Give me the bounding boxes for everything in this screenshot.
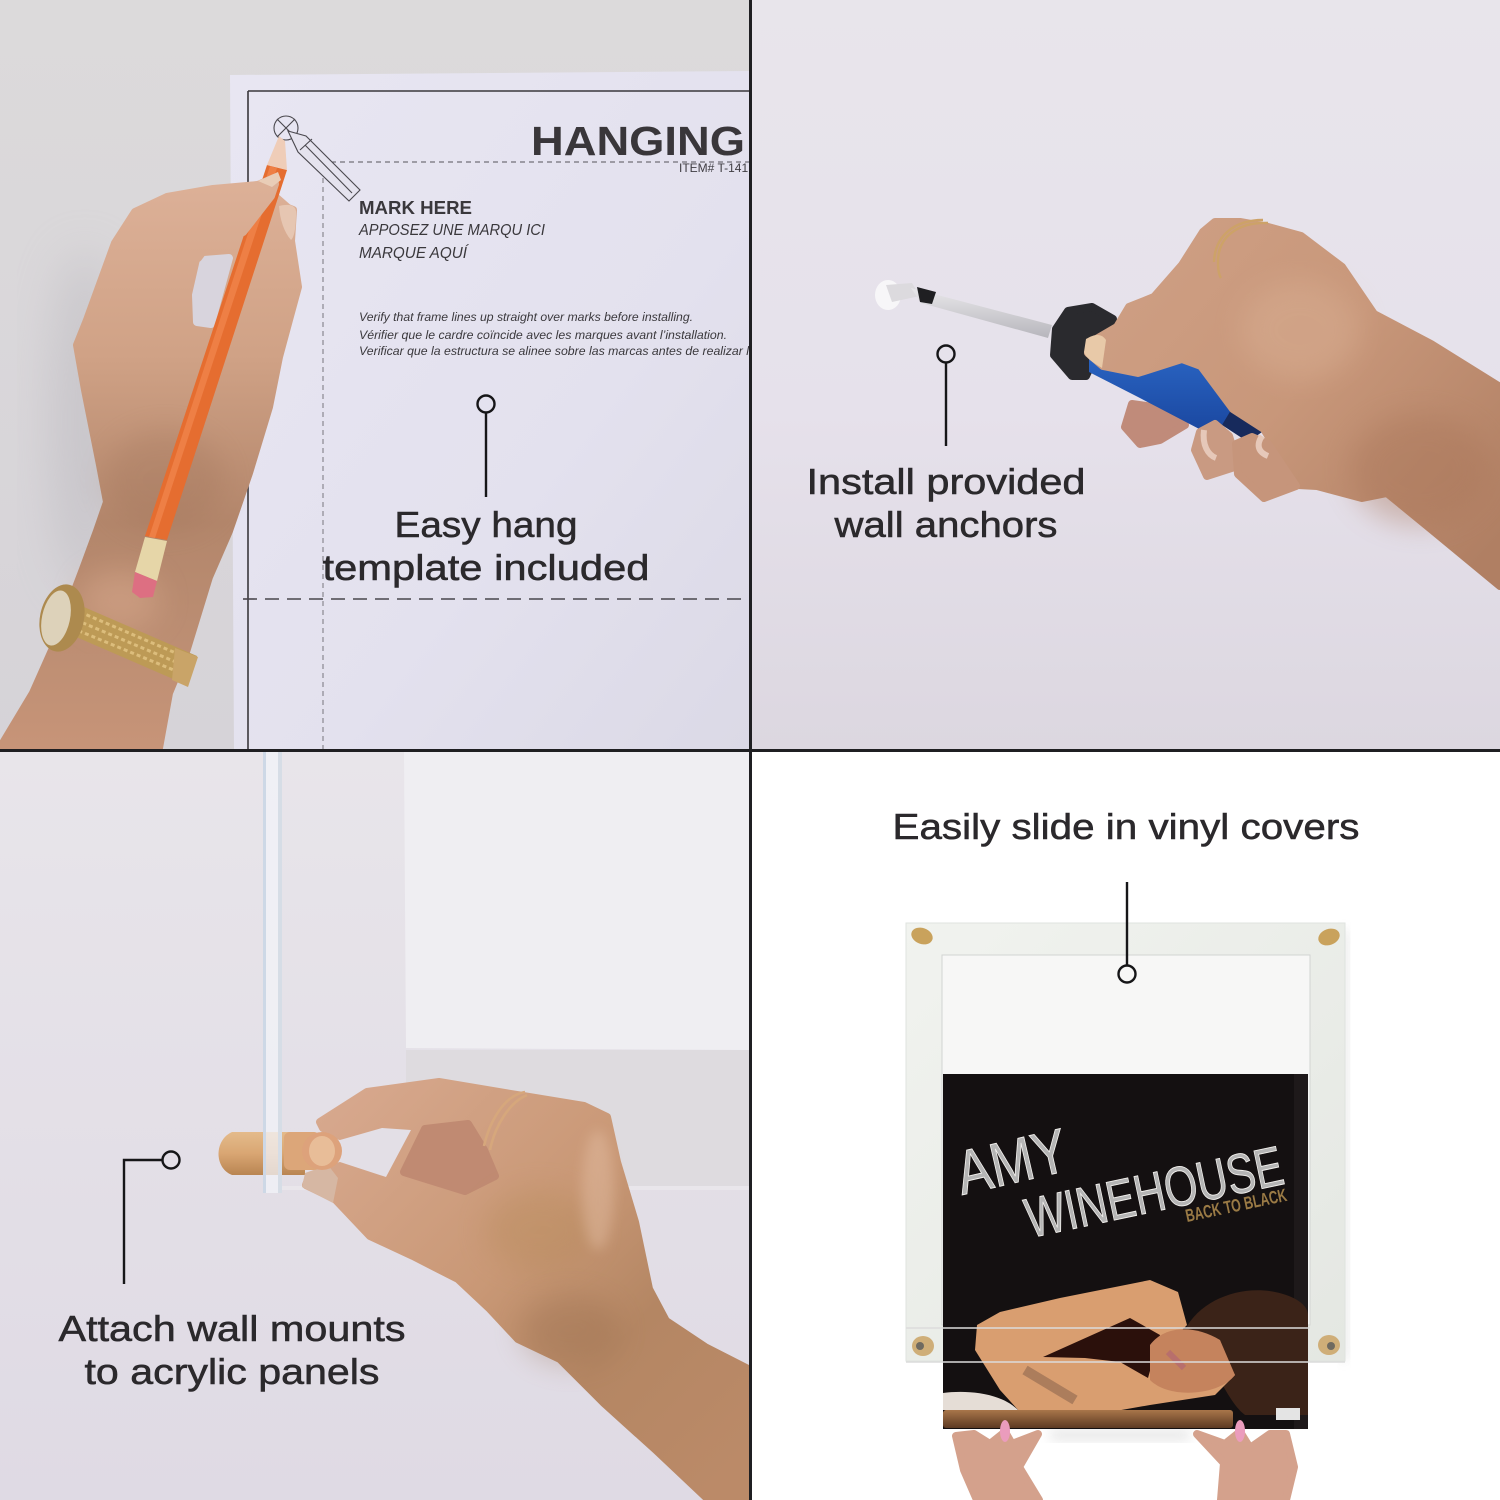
template instructions: Verificar que la estructura se alinee sobre las marcas antes de realizar l bbox=[359, 346, 749, 358]
template mark text: APPOSEZ UNE MARQU ICI bbox=[358, 222, 546, 239]
acrylic bottom edge lines bbox=[906, 1328, 1345, 1362]
panel: easy hang template bbox=[0, 0, 749, 749]
album title bbox=[950, 1116, 1289, 1250]
panel: install wall anchors bbox=[752, 0, 1500, 749]
callout: attach wall mounts: to acrylic panels bbox=[84, 1351, 380, 1392]
template heading: HANGING bbox=[531, 118, 745, 164]
callout: install wall anchors: wall anchors bbox=[833, 504, 1058, 545]
album cover: BACK TO BLACK bbox=[1184, 1185, 1289, 1226]
template mark text bbox=[358, 198, 546, 262]
hands holding album bbox=[956, 1420, 1294, 1500]
album portrait bbox=[943, 1280, 1308, 1428]
template instructions: Vérifier que le cardre coïncide avec les marques avant l’installation. bbox=[359, 330, 727, 342]
callout: install wall anchors bbox=[806, 346, 1086, 545]
callout: easy hang template bbox=[322, 396, 650, 588]
gold wristwatch bbox=[33, 580, 198, 687]
album title: WINEHOUSE bbox=[1019, 1134, 1289, 1250]
template instructions bbox=[359, 312, 749, 358]
gold wall mount bbox=[218, 1132, 305, 1175]
hand attaching mount bbox=[302, 1082, 752, 1500]
screwdriver bbox=[911, 287, 1113, 376]
callout: install wall anchors: Install provided bbox=[806, 461, 1086, 502]
index finger over pencil bbox=[194, 178, 275, 258]
album cover bbox=[943, 1074, 1308, 1429]
hand holding screwdriver bbox=[1084, 220, 1500, 586]
callout: easy hang template: template included bbox=[322, 547, 650, 588]
acrylic frame bbox=[906, 923, 1348, 1361]
callout: attach wall mounts bbox=[58, 1152, 406, 1392]
panel: slide in vinyl covers bbox=[752, 752, 1500, 1500]
template mark text: MARK HERE bbox=[359, 198, 472, 218]
panel: attach wall mounts bbox=[0, 752, 752, 1500]
hand shadow bbox=[50, 276, 102, 561]
template sheet: ITEM# T-141 bbox=[679, 161, 748, 175]
callout: easy hang template: Easy hang bbox=[394, 504, 578, 545]
blue handle bbox=[1089, 359, 1262, 438]
hand writing with pencil bbox=[0, 178, 298, 748]
gold mount cap bbox=[284, 1132, 342, 1170]
white backing sheet bbox=[404, 752, 749, 1050]
wall anchor bbox=[875, 280, 920, 310]
callout: slide in vinyl covers: Easily slide in vinyl covers bbox=[892, 806, 1360, 847]
template mark text: MARQUE AQUÍ bbox=[359, 243, 469, 262]
template instructions: Verify that frame lines up straight over marks before installing. bbox=[359, 312, 693, 324]
callout: slide in vinyl covers bbox=[892, 806, 1360, 982]
orange pencil bbox=[132, 136, 287, 598]
icon: pencil mark bbox=[274, 116, 360, 201]
acrylic panel edge bbox=[263, 752, 282, 1193]
callout: attach wall mounts: Attach wall mounts bbox=[58, 1308, 406, 1349]
album title: AMY bbox=[950, 1116, 1074, 1209]
template sheet bbox=[230, 71, 749, 749]
gold standoffs bbox=[909, 925, 1342, 1356]
lower finger behind handle bbox=[1125, 404, 1185, 444]
